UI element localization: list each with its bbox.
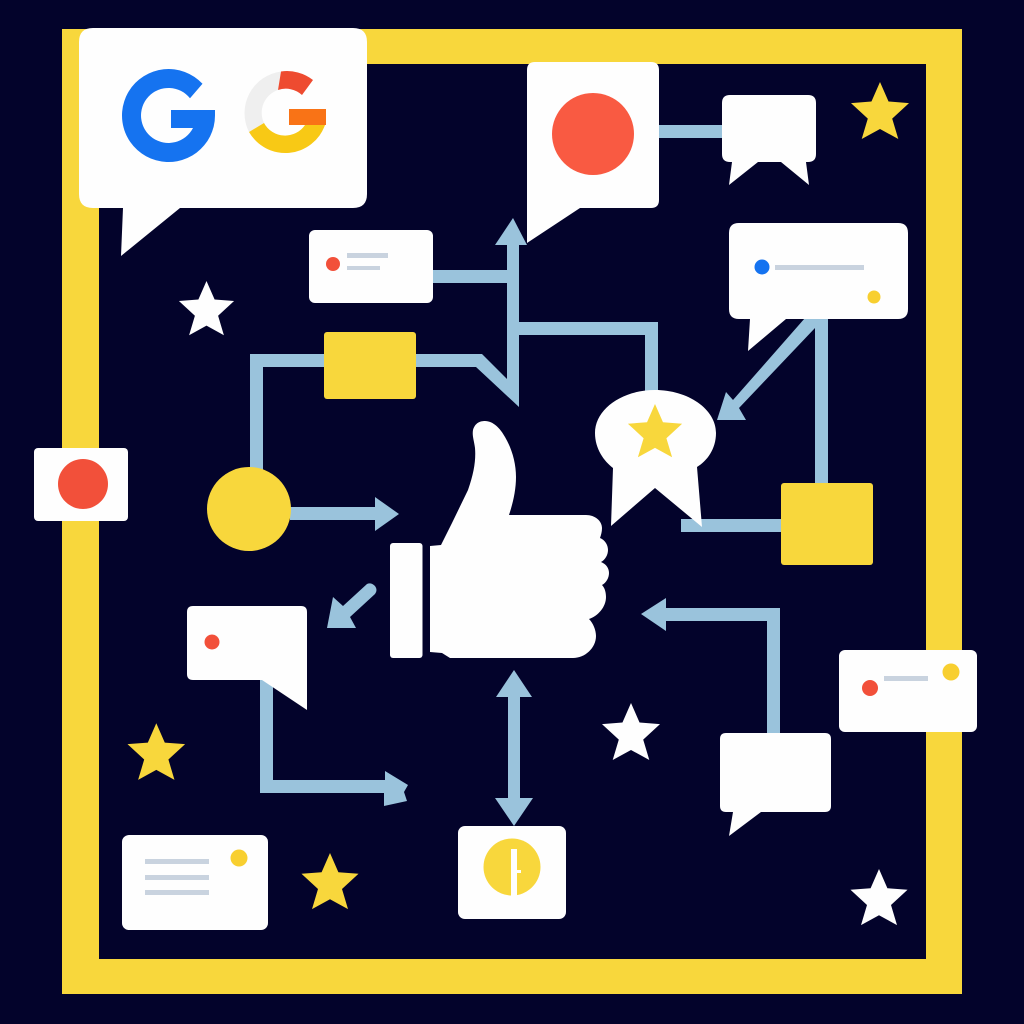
hand xyxy=(430,421,609,658)
connector: red bubble to small bubble xyxy=(655,125,725,138)
star: bottom right white xyxy=(850,869,908,925)
star: top right xyxy=(851,82,909,139)
arrow: lower-left bubble to right xyxy=(260,678,408,806)
connector: up arrow to badge xyxy=(518,322,658,392)
arrow: right bubble to badge xyxy=(717,318,815,420)
connectors and arrows xyxy=(250,125,828,826)
top-left speech bubble with Google logos xyxy=(79,28,367,256)
icon: multicolour G xyxy=(245,71,326,153)
connector: yellow circle to yellow rectangle xyxy=(250,354,324,470)
lower-left speech bubble xyxy=(187,606,307,710)
bottom-left card xyxy=(122,835,268,930)
red circle bubble xyxy=(527,62,659,243)
yellow square xyxy=(781,483,873,565)
arrow: circle to thumb xyxy=(290,497,399,531)
cuff xyxy=(390,543,422,658)
thumbs up icon xyxy=(390,421,609,658)
icon: blue G xyxy=(122,69,215,162)
badge with star xyxy=(595,390,716,527)
arrow: right bubble to thumb xyxy=(641,598,780,737)
star: lower left yellow xyxy=(127,723,185,780)
star: top left white xyxy=(179,281,234,335)
star: bottom yellow xyxy=(301,853,359,909)
yellow circle xyxy=(207,467,291,551)
connector: card to up arrow xyxy=(433,270,508,283)
red circle xyxy=(552,93,634,175)
arrow: yellow rectangle up to red bubble xyxy=(416,218,527,407)
right card with dots xyxy=(839,650,977,732)
right speech bubble xyxy=(729,223,908,351)
small empty bubble with two tails xyxy=(722,95,816,185)
arrow: double-headed vertical xyxy=(495,670,533,826)
connector: yellow square to badge xyxy=(681,519,783,532)
yellow rectangle xyxy=(324,332,416,399)
arrow: thumb to lower-left bubble xyxy=(327,583,376,628)
bottom card with yellow clock icon xyxy=(458,826,566,919)
connector: right bubble to yellow square xyxy=(815,315,828,485)
star: centre white xyxy=(602,703,660,760)
lower-right speech bubble xyxy=(720,733,831,836)
small card with red dot xyxy=(309,230,433,303)
left card with red circle xyxy=(34,448,128,521)
